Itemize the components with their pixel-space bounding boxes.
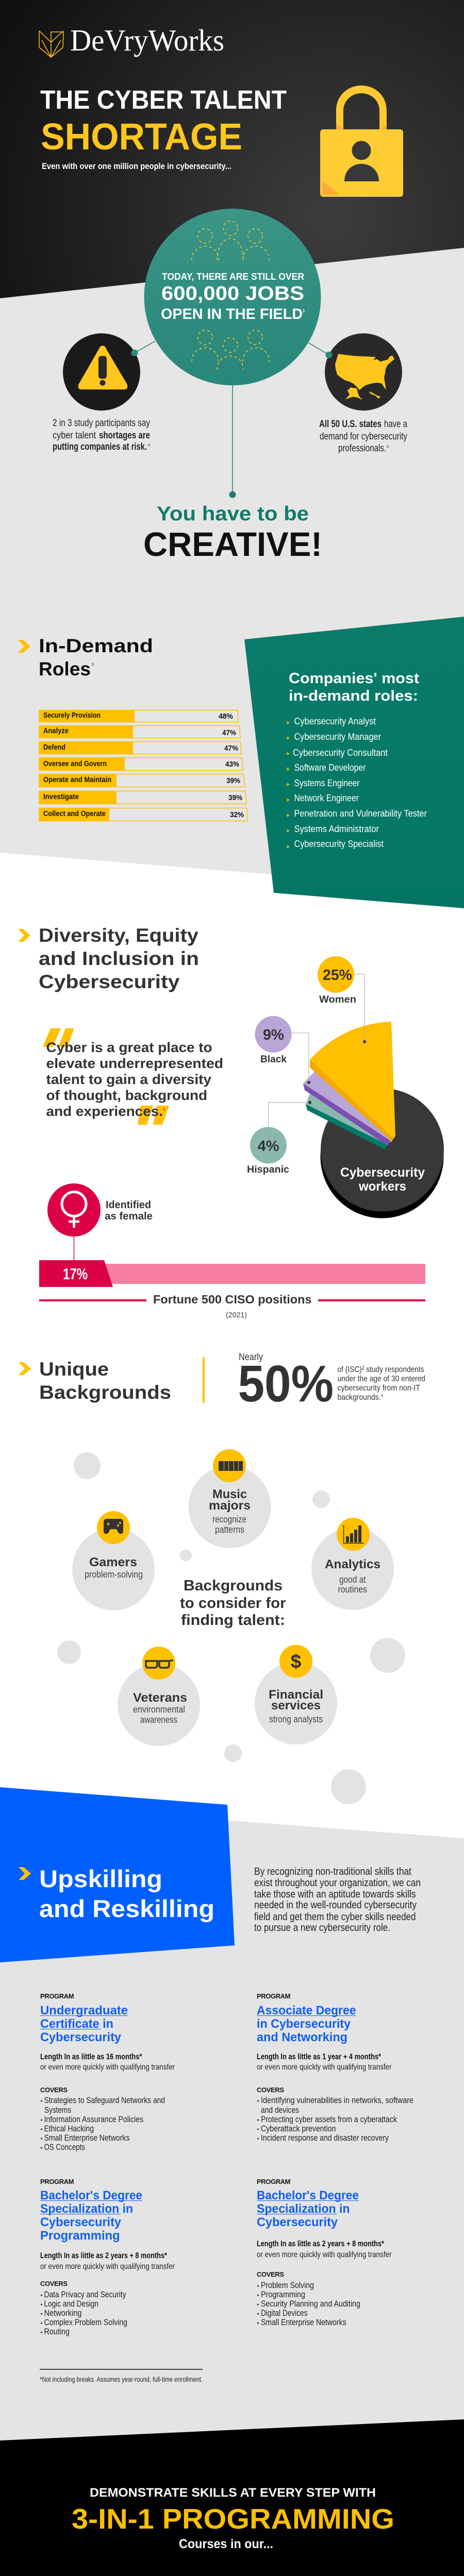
stat: 25% women: 25% bbox=[323, 967, 352, 984]
program: associate degree: PROGRAM bbox=[257, 1992, 291, 2000]
list: roles: Network Engineer bbox=[294, 793, 359, 803]
bubble: music majors: patterns bbox=[215, 1524, 244, 1535]
stat: nearly 50%: of (ISC)² study respondents bbox=[337, 1365, 424, 1374]
heading: backgrounds to consider: to consider for bbox=[180, 1595, 286, 1612]
leader lines bbox=[268, 974, 364, 1127]
program: bachelor's cybersecurity specialization: Problem Solving bbox=[261, 2280, 314, 2290]
stat: nearly 50%: Nearly bbox=[239, 1352, 263, 1363]
list: roles: Systems Administrator bbox=[294, 824, 379, 834]
program: bachelor's cybersecurity specialization: COVERS bbox=[257, 2270, 284, 2278]
list: roles: + bbox=[286, 811, 290, 819]
bar: Analyze bbox=[39, 725, 240, 738]
bubble: financial services: strong analysts bbox=[269, 1714, 323, 1724]
program: undergraduate certificate: Length In as little as 16 months* bbox=[40, 2053, 142, 2061]
bar: Oversee and Govern: Oversee and Govern bbox=[43, 759, 107, 768]
connector lines bbox=[135, 341, 329, 492]
text: shortage stat bbox=[53, 418, 150, 452]
program: bachelor's cybersecurity programming: COVERS bbox=[40, 2280, 68, 2287]
heading: diversity, equity and inclusion: and Inclusion in bbox=[39, 948, 199, 969]
bar: Collect and Operate: Collect and Operate bbox=[43, 809, 106, 818]
heading: unique backgrounds: Backgrounds bbox=[39, 1382, 171, 1403]
program: associate degree: Length In as little as 1 year + 4 months* bbox=[257, 2053, 382, 2061]
panel: dark header background bbox=[0, 0, 464, 298]
bar: Defend: Defend bbox=[43, 743, 65, 752]
quote bbox=[43, 1028, 223, 1125]
pie chart: cybersecurity workers: workers bbox=[358, 1179, 406, 1194]
program: bachelor's cybersecurity programming: Networking bbox=[44, 2308, 81, 2318]
heading: diversity, equity and inclusion: Diversity, Equity bbox=[39, 925, 198, 946]
heading: in-demand roles bbox=[18, 635, 153, 680]
text: upskilling intro: needed in the well-rounded cybersecurity bbox=[254, 1900, 417, 1911]
panel: 600,000 jobs circle: TODAY, THERE ARE STILL OVER bbox=[162, 272, 304, 282]
program: bachelor's cybersecurity programming: Data Privacy and Security bbox=[44, 2290, 126, 2299]
stat: 25% women bbox=[318, 956, 356, 1005]
program: associate degree: in Cybersecurity bbox=[257, 2017, 351, 2031]
program: bachelor's cybersecurity programming: Logic and Design bbox=[44, 2299, 98, 2309]
program: bachelor's cybersecurity programming: or even more quickly with qualifying transfer bbox=[40, 2262, 175, 2271]
program: undergraduate certificate: Certificate in bbox=[40, 2017, 113, 2031]
program: undergraduate certificate bbox=[40, 1992, 175, 2152]
text: upskilling intro: By recognizing non-traditional skills that bbox=[254, 1866, 411, 1877]
bubble: veterans: environmental bbox=[133, 1704, 185, 1715]
program: bachelor's cybersecurity programming bbox=[40, 2178, 175, 2336]
panel: 3-in-1 programming: DEMONSTRATE SKILLS AT EVERY STEP WITH bbox=[90, 2486, 376, 2500]
list: roles: Penetration and Vulnerability Tester bbox=[294, 808, 427, 819]
heading: diversity, equity and inclusion bbox=[18, 925, 199, 992]
program: bachelor's cybersecurity specialization: or even more quickly with qualifying transfer bbox=[257, 2250, 392, 2259]
panel: 600,000 jobs circle: 1 bbox=[303, 309, 305, 313]
program: bachelor's cybersecurity programming: Cybersecurity bbox=[40, 2215, 122, 2229]
program: bachelor's cybersecurity specialization: Small Enterprise Networks bbox=[261, 2317, 346, 2327]
heading: backgrounds to consider: finding talent: bbox=[181, 1612, 285, 1629]
stat: 9% black: 9% bbox=[263, 1027, 284, 1043]
bubble: music majors: majors bbox=[209, 1499, 251, 1513]
program: bachelor's cybersecurity programming: Routing bbox=[44, 2327, 70, 2336]
icon: opening quote bbox=[43, 1028, 74, 1047]
bar: Collect and Operate: 32% bbox=[230, 810, 244, 819]
heading: backgrounds to consider: Backgrounds bbox=[184, 1578, 283, 1594]
panel: upskilling and reskilling: and Reskilling bbox=[39, 1895, 214, 1922]
icon: dashed people bottom bbox=[192, 330, 269, 370]
list: roles: Cybersecurity Specialist bbox=[294, 839, 384, 849]
bar: Investigate: Investigate bbox=[43, 792, 79, 801]
stat: 25% women: Women bbox=[319, 994, 356, 1005]
divider bbox=[203, 1357, 205, 1403]
bubble: veterans: awareness bbox=[140, 1715, 177, 1725]
list: roles: + bbox=[286, 843, 290, 851]
bar: Oversee and Govern bbox=[39, 757, 243, 771]
logo: DeVryWorks: DeVryWorks bbox=[70, 23, 224, 57]
text: identified as female: as female bbox=[105, 1211, 153, 1222]
quote: Cyber is a great place to bbox=[46, 1040, 212, 1055]
program: bachelor's cybersecurity programming: Programming bbox=[40, 2229, 120, 2243]
program: undergraduate certificate: OS Concepts bbox=[44, 2142, 85, 2152]
stat: nearly 50% bbox=[238, 1352, 425, 1413]
bubble: gamers: Gamers bbox=[89, 1555, 137, 1569]
stat: 9% black bbox=[255, 1016, 292, 1065]
program: undergraduate certificate: or even more quickly with qualifying transfer bbox=[40, 2063, 175, 2072]
panel: upskilling and reskilling bbox=[0, 1787, 235, 1962]
bubble: veterans: Veterans bbox=[133, 1691, 187, 1705]
pie chart: cybersecurity workers bbox=[303, 1022, 444, 1218]
program: undergraduate certificate: Ethical Hacking bbox=[44, 2124, 94, 2133]
bubble: gamers: problem-solving bbox=[85, 1569, 143, 1580]
bubble: veterans bbox=[118, 1647, 200, 1746]
text: states stat: have a bbox=[384, 419, 407, 430]
program: associate degree: Incident response and disaster recovery bbox=[261, 2133, 389, 2143]
bar: Operate and Maintain: 39% bbox=[226, 776, 240, 785]
slice: black bbox=[303, 1072, 392, 1146]
pie chart: cybersecurity workers: Cybersecurity bbox=[340, 1165, 425, 1180]
bar: 17% CISO positions bbox=[39, 1260, 425, 1287]
icon: female symbol bbox=[47, 1183, 101, 1261]
heading: you have to be creative: CREATIVE! bbox=[143, 525, 322, 563]
program: associate degree: COVERS bbox=[257, 2086, 284, 2094]
text: identified as female: Identified bbox=[106, 1199, 151, 1211]
bubble: financial services bbox=[255, 1645, 337, 1744]
list: roles: + bbox=[286, 781, 290, 788]
stat: nearly 50%: backgrounds. bbox=[337, 1393, 380, 1402]
heading: you have to be creative: You have to be bbox=[157, 503, 309, 525]
stat: 4% hispanic: 4% bbox=[258, 1138, 279, 1155]
program: associate degree: and devices bbox=[261, 2105, 299, 2115]
text: upskilling intro bbox=[254, 1866, 421, 1934]
panel: 600,000 jobs circle: 600,000 JOBS bbox=[161, 283, 304, 304]
bubble: music majors: recognize bbox=[212, 1514, 246, 1524]
bubble: music majors: Music bbox=[212, 1487, 247, 1501]
text: states stat bbox=[319, 419, 407, 454]
program: undergraduate certificate: COVERS bbox=[40, 2086, 68, 2094]
program: associate degree: and Networking bbox=[257, 2030, 347, 2044]
program: associate degree: Protecting cyber assets from a cyberattack bbox=[261, 2114, 397, 2124]
icon: padlock bbox=[320, 86, 403, 197]
quote: talent to gain a diversity bbox=[46, 1072, 211, 1087]
bubble: financial services: services bbox=[271, 1699, 321, 1713]
bar: Operate and Maintain bbox=[39, 774, 245, 787]
text: shortage stat: 4 bbox=[148, 444, 150, 447]
text: shortage stat: putting companies at risk. bbox=[53, 442, 147, 452]
bar: Investigate bbox=[39, 791, 246, 804]
heading: backgrounds to consider bbox=[180, 1578, 286, 1629]
list: roles: + bbox=[286, 796, 290, 804]
bar: Securely Provision: Securely Provision bbox=[43, 711, 101, 720]
stat: nearly 50%: 4 bbox=[381, 1394, 383, 1398]
program: bachelor's cybersecurity specialization: Security Planning and Auditing bbox=[261, 2299, 360, 2309]
program: bachelor's cybersecurity specialization: Bachelor's Degree bbox=[257, 2189, 359, 2202]
bubble: gamers bbox=[72, 1511, 155, 1611]
list: roles: Cybersecurity Consultant bbox=[293, 748, 388, 758]
bar: Securely Provision: 48% bbox=[219, 712, 233, 721]
panel: 3-in-1 programming bbox=[0, 2419, 464, 2576]
text: shortage stat: shortages are bbox=[99, 430, 150, 441]
program: bachelor's cybersecurity specialization: Cybersecurity bbox=[257, 2215, 338, 2229]
icon: US map circle bbox=[325, 333, 402, 411]
program: bachelor's cybersecurity specialization: Specialization in bbox=[257, 2202, 350, 2216]
bubble: music majors bbox=[189, 1449, 271, 1548]
quote: elevate underrepresented bbox=[46, 1056, 223, 1071]
text: states stat: demand for cybersecurity bbox=[320, 431, 407, 442]
program: bachelor's cybersecurity specialization: Digital Devices bbox=[261, 2308, 307, 2318]
caption: Fortune 500 CISO positions bbox=[39, 1293, 425, 1319]
text: upskilling intro: exist throughout your organization, we can bbox=[254, 1877, 421, 1889]
bubble: analytics: good at bbox=[339, 1574, 366, 1585]
program: bachelor's cybersecurity programming: PROGRAM bbox=[40, 2178, 74, 2185]
program: undergraduate certificate: PROGRAM bbox=[40, 1992, 74, 2000]
icon: piano keys bbox=[219, 1461, 243, 1471]
list: roles bbox=[286, 716, 427, 851]
program: bachelor's cybersecurity specialization: Length In as little as 2 years + 8 months* bbox=[257, 2240, 385, 2248]
list: roles: Cybersecurity Analyst bbox=[294, 716, 376, 726]
panel: 600,000 jobs circle: OPEN IN THE FIELD bbox=[161, 306, 303, 323]
quote: 6 bbox=[163, 1108, 165, 1112]
caption: Fortune 500 CISO positions: Fortune 500 CISO positions bbox=[153, 1293, 311, 1306]
program: undergraduate certificate: Undergraduate bbox=[40, 2004, 128, 2018]
list: roles: + bbox=[286, 719, 290, 726]
panel: companies' most in-demand roles: Companies' most bbox=[289, 670, 419, 687]
bubble: analytics bbox=[311, 1518, 394, 1610]
icon: dashed people top bbox=[192, 221, 269, 260]
text: identified as female bbox=[105, 1199, 153, 1222]
stat: nearly 50%: 50% bbox=[238, 1355, 334, 1413]
subtitle: Even with over one million people in cybersecurity... bbox=[42, 161, 231, 171]
program: associate degree: or even more quickly with qualifying transfer bbox=[257, 2063, 392, 2072]
panel: 3-in-1 programming: Courses in our... bbox=[179, 2537, 273, 2551]
program: associate degree bbox=[257, 1992, 413, 2143]
panel: companies' most in-demand roles bbox=[244, 617, 464, 908]
bar: Securely Provision bbox=[39, 710, 238, 722]
heading: you have to be creative bbox=[143, 503, 322, 563]
panel: 3-in-1 programming: 3-IN-1 PROGRAMMING bbox=[72, 2503, 394, 2535]
title: SHORTAGE bbox=[41, 116, 242, 158]
bar: Operate and Maintain: Operate and Maintain bbox=[43, 775, 111, 784]
icon: glasses bbox=[146, 1660, 173, 1668]
stat: nearly 50%: under the age of 30 entered bbox=[337, 1375, 425, 1383]
heading: unique backgrounds bbox=[19, 1359, 171, 1403]
text: upskilling intro: field and get them the cyber skills needed bbox=[254, 1911, 416, 1923]
bar chart: role demand bbox=[39, 710, 247, 821]
bar: Defend: 47% bbox=[224, 744, 238, 753]
program: undergraduate certificate: Information Assurance Policies bbox=[44, 2114, 143, 2124]
program: undergraduate certificate: Small Enterprise Networks bbox=[44, 2133, 130, 2143]
bubble: analytics: routines bbox=[338, 1584, 367, 1595]
program: bachelor's cybersecurity programming: Length In as little as 2 years + 8 months* bbox=[40, 2251, 168, 2260]
bar: Oversee and Govern: 43% bbox=[225, 760, 239, 769]
text: upskilling intro: to pursue a new cybersecurity role. bbox=[254, 1922, 390, 1934]
text: shortage stat: cyber talent bbox=[53, 430, 96, 441]
program: associate degree: Identifying vulnerabilities in networks, software bbox=[261, 2095, 413, 2105]
program: bachelor's cybersecurity specialization bbox=[257, 2178, 392, 2327]
heading: in-demand roles: In-Demand bbox=[39, 635, 153, 656]
slice: hispanic bbox=[306, 1094, 388, 1149]
text: states stat: All 50 U.S. states bbox=[319, 419, 382, 430]
stat: 4% hispanic: Hispanic bbox=[247, 1164, 289, 1175]
program: bachelor's cybersecurity programming: Bachelor's Degree bbox=[40, 2189, 142, 2202]
list: roles: + bbox=[286, 827, 290, 835]
stat: 9% black: Black bbox=[260, 1054, 287, 1065]
bar: 17% CISO positions: 17% bbox=[63, 1265, 88, 1283]
heading: diversity, equity and inclusion: Cybersecurity bbox=[39, 971, 180, 992]
icon: closing quote bbox=[138, 1106, 169, 1125]
program: undergraduate certificate: Cybersecurity bbox=[40, 2030, 122, 2044]
text: shortage stat: 2 in 3 study participants say bbox=[53, 418, 150, 429]
list: roles: Cybersecurity Manager bbox=[294, 732, 381, 742]
bar: Analyze: 47% bbox=[222, 728, 236, 737]
dot bbox=[229, 492, 236, 498]
panel: companies' most in-demand roles: in-demand roles: bbox=[289, 688, 418, 704]
quote: of thought, background bbox=[46, 1088, 207, 1103]
icon: bar graph bbox=[343, 1525, 364, 1544]
bubble: analytics: Analytics bbox=[325, 1557, 380, 1571]
list: roles: + bbox=[286, 734, 290, 742]
panel: 600,000 jobs circle bbox=[144, 209, 321, 385]
icon: gamepad bbox=[104, 1519, 123, 1534]
program: bachelor's cybersecurity programming: Complex Problem Solving bbox=[44, 2317, 127, 2327]
icon: dollar sign: $ bbox=[291, 1651, 302, 1672]
bar: Analyze: Analyze bbox=[43, 726, 69, 735]
program: bachelor's cybersecurity specialization: PROGRAM bbox=[257, 2178, 291, 2185]
quote: and experiences. bbox=[46, 1104, 163, 1119]
heading: unique backgrounds: Unique bbox=[39, 1359, 109, 1380]
program: bachelor's cybersecurity specialization: Programming bbox=[261, 2290, 305, 2299]
caption: Fortune 500 CISO positions: (2021) bbox=[226, 1311, 247, 1319]
list: roles: Systems Engineer bbox=[294, 778, 360, 788]
bubble: financial services: Financial bbox=[269, 1688, 323, 1702]
program: undergraduate certificate: Strategies to Safeguard Networks and bbox=[44, 2095, 165, 2105]
decorative bubbles bbox=[57, 1452, 405, 1804]
stat: nearly 50%: cybersecurity from non-IT bbox=[337, 1384, 420, 1393]
text: upskilling intro: take those with an aptitude towards skills bbox=[254, 1889, 416, 1900]
program: associate degree: Associate Degree bbox=[257, 2004, 356, 2018]
bar: Investigate: 39% bbox=[228, 793, 242, 802]
bar: Collect and Operate bbox=[39, 808, 247, 821]
title: THE CYBER TALENT bbox=[40, 85, 287, 114]
list: roles: Software Developer bbox=[294, 762, 366, 773]
text: states stat: professionals. bbox=[338, 443, 386, 454]
program: bachelor's cybersecurity programming: Specialization in bbox=[40, 2202, 133, 2216]
icon: warning circle bbox=[63, 333, 140, 411]
panel: upskilling and reskilling: Upskilling bbox=[39, 1865, 162, 1892]
list: roles: + bbox=[286, 765, 290, 773]
title bbox=[40, 85, 287, 158]
slice: women bbox=[310, 1022, 395, 1141]
heading: in-demand roles: 5 bbox=[92, 663, 94, 667]
list: roles: + bbox=[286, 750, 290, 757]
heading: in-demand roles: Roles bbox=[39, 658, 91, 680]
text: states stat: 3 bbox=[387, 445, 389, 449]
bar: Defend bbox=[39, 741, 241, 754]
program: associate degree: Cyberattack prevention bbox=[261, 2124, 336, 2133]
footnote: *Not including breaks. Assumes year-round, full-time enrollment. bbox=[40, 2375, 203, 2383]
icon: shield bbox=[39, 31, 63, 57]
stat: 4% hispanic bbox=[247, 1127, 289, 1175]
program: undergraduate certificate: Systems bbox=[44, 2105, 71, 2115]
